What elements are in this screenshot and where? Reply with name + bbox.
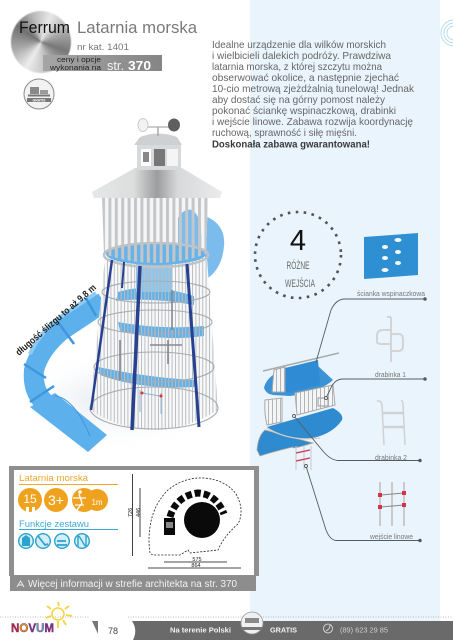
badge: free delivery	[24, 79, 54, 109]
climbing wall small	[285, 360, 320, 393]
corner concentric circles icon	[441, 20, 453, 46]
description text: latarnia morska, z której szczytu można	[212, 61, 382, 73]
description text: pokonać ściankę wspinaczkową, drabinki	[212, 105, 396, 117]
heading: Latarnia morska: Latarnia morska	[19, 473, 89, 484]
description text: i wielbicieli dalekich podróży. Prawdziwa	[212, 50, 391, 62]
price reference strip: 370	[128, 59, 151, 73]
description text: obserwować okolice, a następnie zjechać	[212, 72, 399, 84]
rope entry icon	[378, 482, 406, 526]
slide upper section behind tower	[205, 216, 224, 280]
plan drawing: 446	[136, 508, 142, 517]
page number: 78	[108, 626, 118, 636]
description text: Doskonała zabawa gwarantowana!	[212, 138, 370, 150]
price reference strip: ceny i opcje	[57, 55, 101, 64]
title	[19, 18, 198, 37]
age and user icons: 15	[23, 492, 37, 506]
title: Ferrum	[19, 18, 70, 37]
slide length label: długość ślizgu to aż 9,8 m	[14, 282, 99, 358]
function icons	[19, 534, 89, 548]
footer gratis text: GRATIS	[270, 626, 297, 634]
ladder 1 icon	[377, 317, 403, 362]
footer	[0, 602, 453, 640]
plan drawing: 726	[128, 508, 134, 517]
age and user icons: 3+	[48, 492, 64, 508]
ladder 2 icon	[377, 400, 405, 445]
badge: free delivery: GRATIS	[33, 98, 46, 102]
age and user icons: 1m	[91, 498, 103, 507]
roof	[92, 168, 222, 198]
railings	[265, 367, 335, 425]
badge: 4 different entries: WEJŚCIA	[285, 277, 315, 290]
middle platform	[267, 408, 342, 439]
description text	[212, 39, 415, 150]
spiral slide	[24, 293, 107, 452]
novum sun logo	[10, 602, 72, 635]
price reference strip: str.	[107, 59, 124, 73]
label: climbing wall: ścianka wspinaczkowa	[357, 289, 426, 298]
badge: 4 different entries: RÓŻNE	[286, 259, 310, 272]
lower cage	[90, 258, 218, 430]
description text: i wejście linowe. Zabawa rozwija koordynację	[212, 116, 413, 128]
title: Latarnia morska	[77, 18, 198, 37]
rope below	[296, 446, 311, 470]
wind vane	[138, 118, 180, 136]
label: ladder 1: drabinka 1	[375, 370, 406, 379]
architect zone note: Więcej informacji w strefie architekta na str. 370	[28, 579, 237, 590]
small entries structure illustration	[257, 353, 342, 470]
phone icon	[324, 624, 332, 633]
age and user icons	[18, 488, 108, 512]
description text: ruchową, sprawność i siłę mięśni.	[212, 127, 357, 139]
lighthouse illustration	[10, 118, 230, 452]
upper platform	[264, 366, 333, 396]
description text: Idealne urządzenie dla wilków morskich	[212, 39, 386, 51]
catalogue number: nr kat. 1401	[77, 42, 129, 53]
label: rope entry: wejście linowe	[369, 532, 413, 541]
upper cage	[102, 197, 208, 267]
lower platform	[257, 430, 313, 456]
metal disc behind title	[11, 11, 71, 73]
lantern	[134, 134, 182, 170]
novum sun logo: NOVUM	[11, 621, 54, 635]
panel: product specification	[9, 466, 259, 576]
footer gratis badge	[241, 612, 263, 634]
architect zone note	[10, 576, 256, 591]
ground shadow	[10, 350, 230, 450]
plan drawing: 575	[192, 557, 202, 563]
label: ladder 2: drabinka 2	[375, 453, 407, 462]
leader lines	[292, 298, 426, 542]
footer grey bar	[132, 621, 453, 640]
dark blue posts	[91, 260, 199, 430]
description text: 10-cio metrową zjeżdżalnią tunelową! Jednak	[212, 83, 415, 95]
description text: aby dostać się na górny pomost należy	[212, 94, 386, 106]
badge: 4 different entries	[255, 212, 341, 298]
badge: 4 different entries: 4	[290, 225, 306, 257]
blue background panel	[250, 0, 440, 622]
footer delivery text: Na terenie Polski	[170, 626, 231, 634]
heading: Funkcje zestawu: Funkcje zestawu	[19, 519, 89, 530]
phone number: (89) 623 29 85	[340, 626, 388, 634]
plan drawing: 864	[191, 563, 201, 569]
price reference strip: wykonania na	[49, 63, 102, 72]
plan drawing	[128, 474, 241, 569]
red rope entry	[140, 390, 161, 414]
climbing wall icon	[364, 233, 418, 279]
spiral decks	[98, 262, 204, 388]
price reference strip	[43, 55, 162, 73]
